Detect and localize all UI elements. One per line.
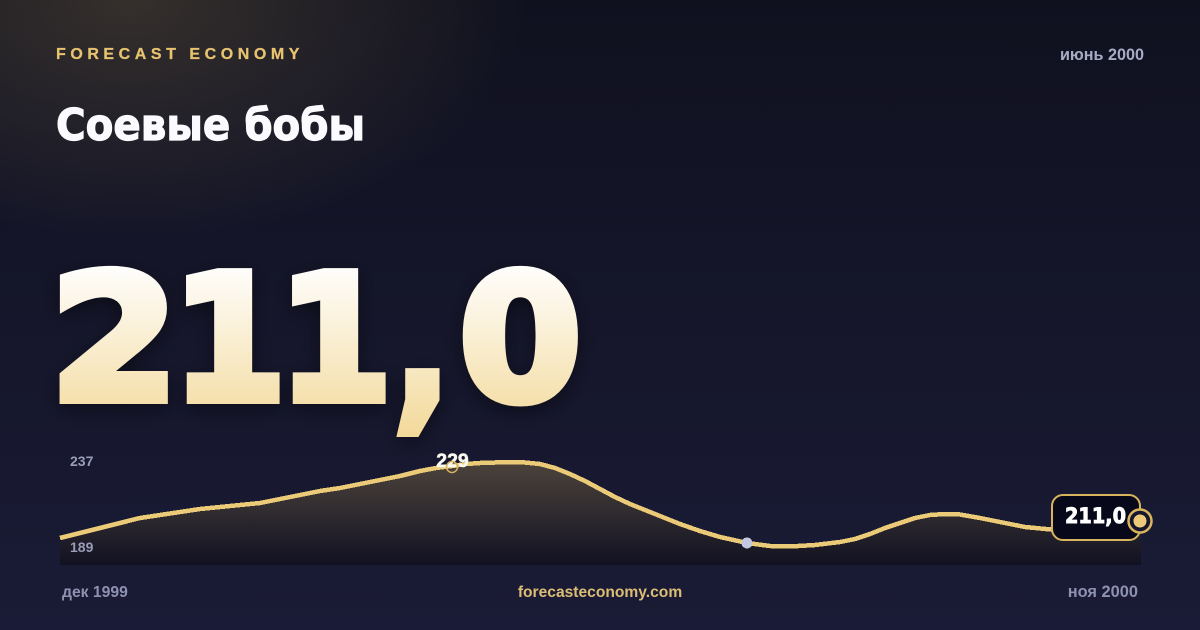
axis min label: 189 bbox=[70, 539, 94, 555]
big value: 2 bbox=[50, 239, 179, 441]
current value tag: 211,0 bbox=[1065, 504, 1126, 528]
low marker bbox=[742, 538, 752, 548]
brand label: FORECAST ECONOMY bbox=[56, 46, 304, 63]
end date: ноя 2000 bbox=[1068, 583, 1138, 601]
start date: дек 1999 bbox=[62, 584, 128, 601]
big value: 0 bbox=[459, 239, 582, 441]
area chart bbox=[60, 450, 1152, 565]
big value: , bbox=[391, 231, 454, 452]
title: Соевые бобы bbox=[56, 100, 365, 151]
peak marker bbox=[446, 462, 458, 472]
date label: июнь 2000 bbox=[1060, 46, 1144, 64]
big value: 11 bbox=[172, 239, 393, 442]
area fill bbox=[60, 462, 1141, 565]
current value tag bbox=[1052, 495, 1140, 540]
peak label: 229 bbox=[436, 450, 469, 472]
big value bbox=[50, 231, 582, 452]
axis max label: 237 bbox=[70, 453, 94, 469]
website: forecasteconomy.com bbox=[518, 584, 682, 601]
current point marker bbox=[1128, 510, 1152, 532]
price line bbox=[60, 462, 1056, 546]
